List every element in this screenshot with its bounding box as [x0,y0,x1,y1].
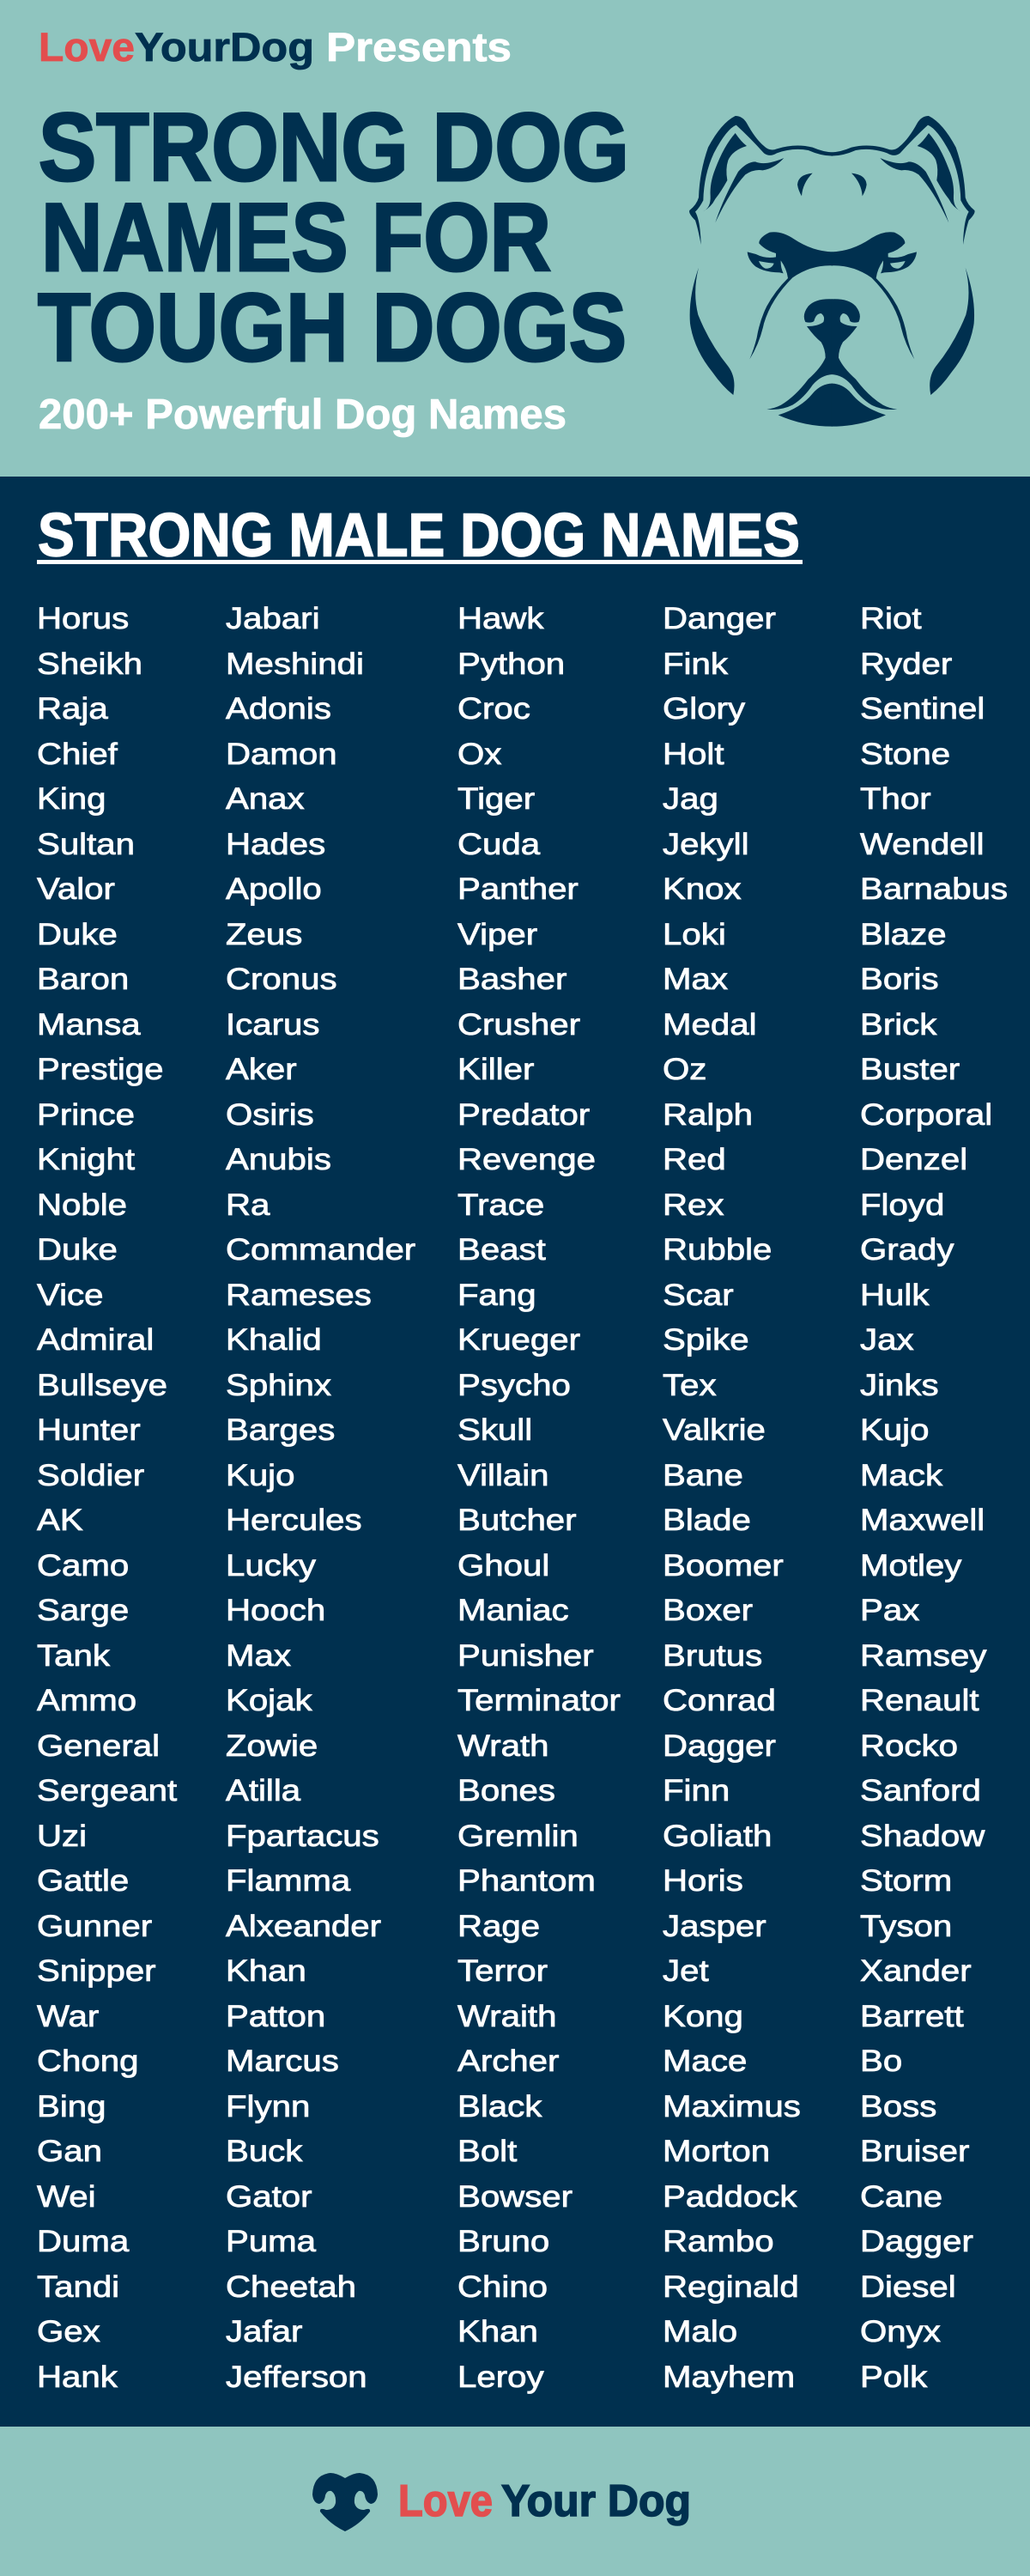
name column 2: Khalid [225,1322,321,1357]
name column 1: Chief [36,737,117,771]
name column 4: Boomer [663,1548,784,1583]
name column 5: Brick [860,1007,936,1042]
panel: footer [0,2427,1030,2576]
name column 5 [860,601,1008,2394]
name column 3: Cuda [457,827,540,861]
name column 3: Maniac [457,1593,569,1627]
name column 5: Ryder [860,647,952,681]
name column 1: Chong [36,2044,138,2078]
name column 4: Red [663,1142,726,1176]
name column 1: Snipper [36,1953,155,1988]
name column 4: Ralph [663,1097,753,1132]
name column 3: Wrath [457,1728,549,1763]
name column 2: Gator [225,2179,312,2214]
name column 5: Kujo [860,1413,929,1447]
name column 4: Dagger [663,1728,776,1763]
name column 2: Alxeander [225,1909,381,1943]
name column 1: Sergeant [36,1773,177,1807]
name column 3: Basher [457,962,566,996]
name column 1: War [36,1999,99,2033]
name column 5: Bo [860,2044,902,2078]
name column 1: Duke [36,1232,117,1267]
panel: strong male dog names [0,477,1030,2427]
name column 5: Dagger [860,2224,973,2258]
name column 5: Barrett [860,1999,964,2033]
name column 2: Barges [225,1413,335,1447]
name column 1: Valor [36,872,114,906]
name column 3: Ghoul [457,1548,549,1583]
name column 3: Black [457,2089,542,2123]
name column 1: Sarge [36,1593,129,1627]
name column 5: Floyd [860,1188,944,1222]
name column 2: Anubis [225,1142,330,1176]
name column 5: Xander [860,1953,972,1988]
name column 3: Butcher [457,1503,577,1537]
name column 5: Ramsey [860,1638,986,1673]
name column 2: Cronus [225,962,336,996]
footer brand name: Your Dog [501,2476,691,2526]
name column 1: Ammo [36,1683,136,1717]
icon: bulldog face [689,116,975,427]
subtitle: 200+ Powerful Dog Names [39,392,566,438]
name column 4: Tex [663,1368,717,1402]
name column 1: General [36,1728,160,1763]
name column 2: Kojak [225,1683,312,1717]
name column 2: Jefferson [225,2360,367,2394]
name column 4: Medal [663,1007,757,1042]
name column 2: Puma [225,2224,316,2258]
name column 2: Flamma [225,1863,350,1898]
name column 4: Jet [663,1953,709,1988]
name column 4: Fink [663,647,728,681]
name column 1: Duke [36,917,117,951]
name column 2: Flynn [225,2089,310,2123]
name column 2: Icarus [225,1007,319,1042]
name column 5: Stone [860,737,950,771]
name column 5: Hulk [860,1278,929,1312]
name column 4: Danger [663,601,776,635]
name column 5: Riot [860,601,922,635]
heading: STRONG MALE DOG NAMES [38,501,800,570]
footer brand name [398,2476,691,2526]
name column 5: Grady [860,1232,954,1267]
name column 5: Cane [860,2179,942,2214]
left half of face [689,116,833,427]
name column 3: Python [457,647,565,681]
name column 5: Bruiser [860,2134,969,2168]
name column 1: Prestige [36,1052,163,1086]
name column 4: Boxer [663,1593,753,1627]
name column 2: Hooch [225,1593,325,1627]
name column 5: Diesel [860,2269,956,2304]
name column 1: Gex [36,2314,100,2348]
name column 4: Rex [663,1188,724,1222]
name column 5: Pax [860,1593,919,1627]
presenter line: YourDog [135,24,314,70]
name column 5: Renault [860,1683,979,1717]
icon: heart dog nose logo [312,2473,378,2531]
name column 5: Denzel [860,1142,967,1176]
name column 5: Sanford [860,1773,981,1807]
name column 2: Adonis [225,691,330,726]
name column 3: Chino [457,2269,548,2304]
name column 5: Jinks [860,1368,939,1402]
name column 2: Jabari [225,601,319,635]
name column 4: Rambo [663,2224,774,2258]
name column 1: Gattle [36,1863,129,1898]
name column 2: Buck [225,2134,302,2168]
name column 1: Soldier [36,1458,144,1492]
name column 2: Rameses [225,1278,371,1312]
name column 2: Cheetah [225,2269,356,2304]
name column 4 [663,601,801,2394]
name column 2: Khan [225,1953,306,1988]
name column 3: Skull [457,1413,532,1447]
name column 4: Oz [663,1052,706,1086]
name column 1: Hank [36,2360,117,2394]
name column 2: Zeus [225,917,302,951]
name column 2: Commander [225,1232,415,1267]
name column 2: Marcus [225,2044,338,2078]
name column 5: Wendell [860,827,985,861]
name column 5: Barnabus [860,872,1008,906]
name column 1: Sultan [36,827,135,861]
name column 5: Storm [860,1863,952,1898]
name column 1 [36,601,177,2394]
name column 4: Malo [663,2314,737,2348]
name column 1: Tank [36,1638,109,1673]
name column 3: Krueger [457,1322,580,1357]
name column 2: Kujo [225,1458,294,1492]
name column 1: Knight [36,1142,135,1176]
title: NAMES FOR [41,184,551,291]
title: STRONG DOG [39,94,629,201]
name column 3: Fang [457,1278,536,1312]
name column 1: Baron [36,962,129,996]
name column 2: Patton [225,1999,325,2033]
name column 4: Brutus [663,1638,762,1673]
name column 4: Valkrie [663,1413,766,1447]
name column 3: Tiger [457,781,535,816]
name column 5: Blaze [860,917,947,951]
name column 5: Mack [860,1458,942,1492]
presenter line [39,24,512,70]
name column 3: Predator [457,1097,590,1132]
name column 4: Maximus [663,2089,801,2123]
name column 2: Hercules [225,1503,361,1537]
name column 1: Bing [36,2089,106,2123]
name column 3: Leroy [457,2360,544,2394]
name column 5: Jax [860,1322,914,1357]
name column 4: Goliath [663,1819,772,1853]
name column 3: Terminator [457,1683,621,1717]
name column 2: Jafar [225,2314,302,2348]
name column 3: Bones [457,1773,555,1807]
name column 3: Bowser [457,2179,573,2214]
name column 3: Revenge [457,1142,596,1176]
name column 5: Rocko [860,1728,958,1763]
name column 4: Conrad [663,1683,776,1717]
name column 3: Khan [457,2314,538,2348]
name column 3: Bolt [457,2134,517,2168]
name column 5: Thor [860,781,931,816]
title [38,94,629,381]
name column 3: Terror [457,1953,548,1988]
name column 5: Boss [860,2089,936,2123]
name column 1: King [36,781,106,816]
name column 1: Camo [36,1548,129,1583]
name column 2: Hades [225,827,325,861]
name column 5: Motley [860,1548,961,1583]
name column 5: Boris [860,962,939,996]
name column 5: Corporal [860,1097,992,1132]
name column 3: Punisher [457,1638,594,1673]
name column 3: Ox [457,737,501,771]
name column 2: Anax [225,781,304,816]
name column 2 [225,601,415,2394]
name column 1: Uzi [36,1819,87,1853]
name column 1: Duma [36,2224,129,2258]
name column 2: Zowie [225,1728,318,1763]
name column 1: Wei [36,2179,95,2214]
name column 5: Sentinel [860,691,985,726]
name column 2: Lucky [225,1548,316,1583]
panel: header [0,0,1030,477]
name column 4: Paddock [663,2179,797,2214]
name column 3 [457,601,621,2394]
name column 3: Trace [457,1188,544,1222]
title: TOUGH DOGS [38,274,627,381]
name column 3: Phantom [457,1863,596,1898]
name column 1: Gan [36,2134,101,2168]
presenter line: Presents [326,24,512,70]
name column 3: Croc [457,691,530,726]
name column 4: Knox [663,872,742,906]
name column 4: Loki [663,917,726,951]
name column 4: Holt [663,737,724,771]
name column 3: Wraith [457,1999,556,2033]
name column 2: Aker [225,1052,296,1086]
name column 2: Apollo [225,872,321,906]
name column 4: Spike [663,1322,749,1357]
name column 4: Mayhem [663,2360,795,2394]
name column 3: Hawk [457,601,544,635]
name column 1: Horus [36,601,129,635]
name column 3: Killer [457,1052,534,1086]
name column 2: Sphinx [225,1368,330,1402]
name column 3: Archer [457,2044,559,2078]
name column 4: Rubble [663,1232,772,1267]
name column 2: Atilla [225,1773,300,1807]
name column 1: Sheikh [36,647,142,681]
name column 3: Bruno [457,2224,549,2258]
footer brand name: Love [398,2476,493,2526]
name column 2: Damon [225,737,336,771]
name column 1: Hunter [36,1413,140,1447]
name column 1: Prince [36,1097,134,1132]
name column 4: Bane [663,1458,743,1492]
name column 1: Tandi [36,2269,119,2304]
name column 4: Glory [663,691,745,726]
name column 5: Maxwell [860,1503,985,1537]
name column 4: Morton [663,2134,770,2168]
name column 3: Villain [457,1458,549,1492]
name column 4: Blade [663,1503,751,1537]
name column 2: Ra [225,1188,270,1222]
name column 1: Admiral [36,1322,154,1357]
name column 3: Gremlin [457,1819,579,1853]
name column 3: Rage [457,1909,540,1943]
presenter line: Love [39,24,135,70]
name column 4: Jasper [663,1909,766,1943]
right half of face [832,116,975,427]
name column 2: Max [225,1638,290,1673]
name column 1: Noble [36,1188,127,1222]
name column 2: Meshindi [225,647,363,681]
name column 2: Fpartacus [225,1819,379,1853]
name column 4: Finn [663,1773,730,1807]
name column 5: Onyx [860,2314,941,2348]
name column 4: Jag [663,781,718,816]
name column 1: Raja [36,691,107,726]
name column 4: Scar [663,1278,734,1312]
name column 1: Gunner [36,1909,152,1943]
name column 5: Polk [860,2360,927,2394]
name column 3: Panther [457,872,579,906]
name column 2: Osiris [225,1097,313,1132]
name column 3: Psycho [457,1368,571,1402]
name column 4: Kong [663,1999,743,2033]
name column 1: Vice [36,1278,103,1312]
name column 4: Mace [663,2044,747,2078]
name column 1: Bullseye [36,1368,167,1402]
name column 3: Beast [457,1232,546,1267]
name column 4: Horis [663,1863,743,1898]
name column 1: AK [36,1503,82,1537]
name column 4: Reginald [663,2269,799,2304]
name column 1: Mansa [36,1007,140,1042]
name column 3: Viper [457,917,537,951]
name column 4: Jekyll [663,827,749,861]
name column 5: Tyson [860,1909,952,1943]
name column 5: Buster [860,1052,960,1086]
name column 3: Crusher [457,1007,580,1042]
name column 5: Shadow [860,1819,985,1853]
name column 4: Max [663,962,728,996]
